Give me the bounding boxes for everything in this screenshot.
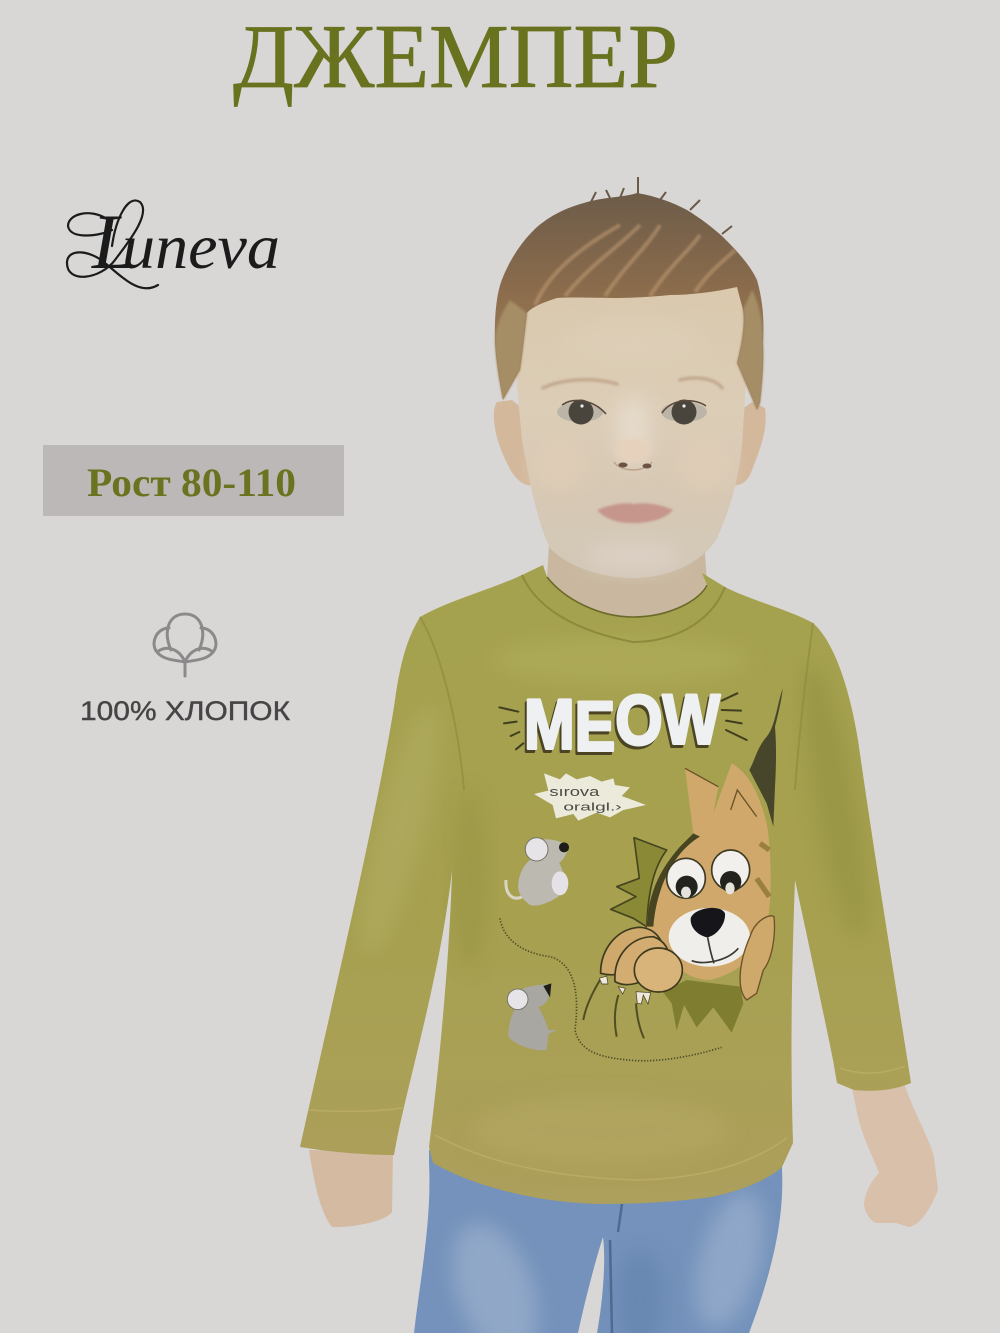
torn fabric, left [611,838,667,927]
speed lines [499,693,747,749]
material label: 100% ХЛОПОК [80,696,290,726]
cat head [647,763,771,980]
face [514,270,747,578]
cat tearing through fabric [583,688,783,1038]
ears [494,400,766,485]
cat right paw [740,916,774,1000]
left hand [309,1150,393,1227]
MEOW lettering: MEOW [524,679,720,766]
cat eyes [667,850,750,898]
speech bubble [534,773,646,821]
eyebrows [543,378,722,388]
mouse, upper [506,838,569,906]
size badge [43,445,344,516]
mouse, lower [507,983,557,1050]
icon: cotton boll [154,614,216,676]
speech bubble: oralgl.› [563,802,622,814]
nose [614,438,652,470]
facial highlights [534,319,731,570]
mouth [597,503,673,523]
eyes [557,400,707,424]
shirt print, drawn in a 3× grid anchored at 480,670 [499,679,783,1061]
cat left paw [599,927,682,1004]
jeans [414,1150,782,1333]
dotted mouse trail [500,918,722,1061]
hair [495,177,763,410]
brand logo: Luneva: L [91,198,135,285]
brand logo: Luneva: uneva [122,211,280,282]
torn fabric, upper right [749,688,783,827]
torn fabric, lower [663,980,743,1033]
jumper [300,565,911,1204]
boy model [300,177,938,1333]
size badge: Рост 80-110 [87,460,296,505]
right hand [852,1086,938,1227]
cat muzzle [669,908,750,967]
brand logo: Luneva [67,198,280,288]
cat nose and mouth [691,908,738,963]
neck [547,540,707,617]
speech bubble: sırova [549,785,601,799]
title: ДЖЕМПЕР [233,6,678,107]
